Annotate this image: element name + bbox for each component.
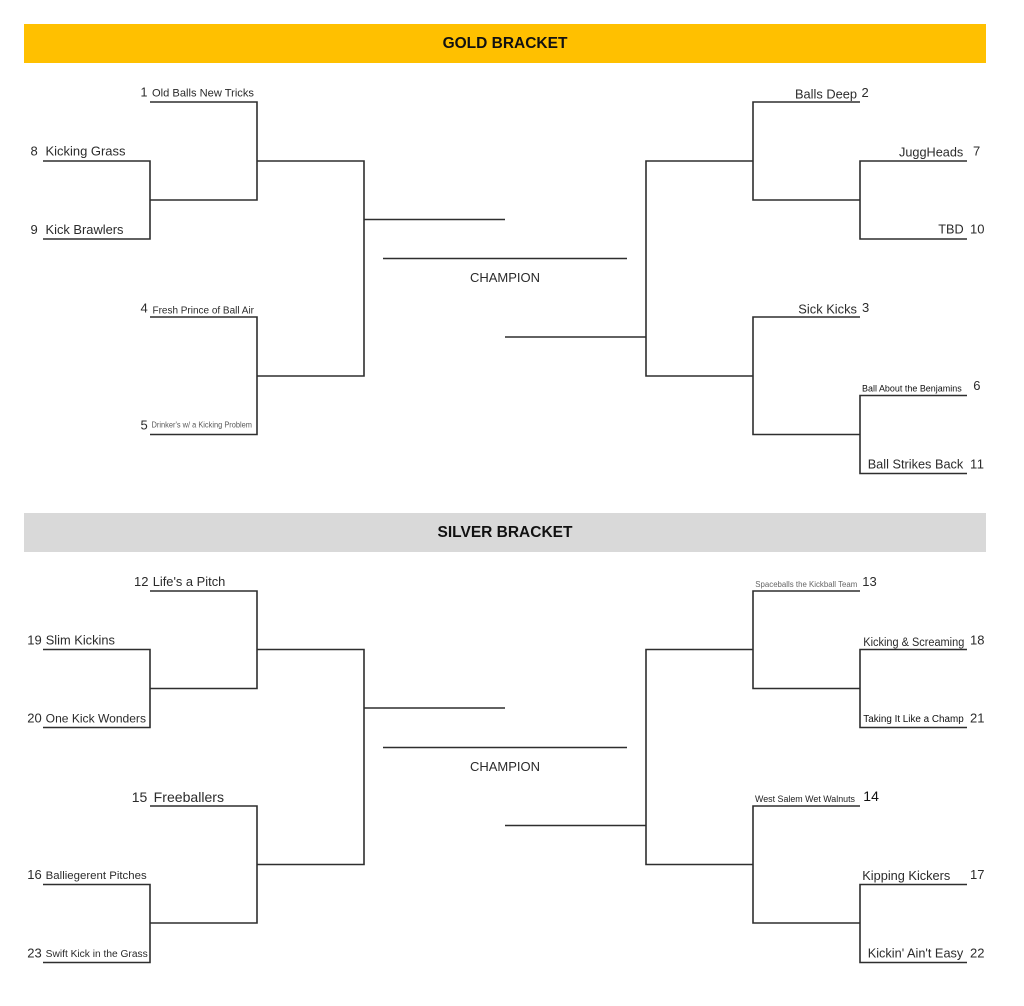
team: 23 Swift Kick in the Grass: 23 [27,945,42,960]
team: 19 Slim Kickins: 19 [27,632,42,647]
team: 3 Sick Kicks: 3 [862,300,869,315]
team: 14 West Salem Wet Walnuts: 14 [863,788,879,804]
team: 13 Spaceballs the Kickball Team [755,574,877,589]
team: 3 Sick Kicks: Sick Kicks [798,301,857,316]
team: 21 Taking It Like a Champ: 21 [970,711,984,726]
team: 7 JuggHeads: JuggHeads [899,145,964,160]
bracket lines: gold left [43,102,505,434]
team: 5 Drinker's w/ a Kicking Problem: Drinker's w/ a Kicking Problem [152,421,252,430]
team: 22 Kickin' Ain't Easy: Kickin' Ain't Easy [868,946,964,961]
team: 12 Life's a Pitch: 12 [134,574,148,589]
heading: silver bracket [24,513,986,552]
heading: gold bracket [24,24,986,63]
team: 18 Kicking & Screaming: 18 [970,632,984,647]
team: 11 Ball Strikes Back: 11 [970,457,984,472]
team: 15 Freeballers: Freeballers [154,789,224,805]
team: 1 Old Balls New Tricks: 1 [140,86,148,100]
team: 2 Balls Deep: 2 [862,85,869,100]
team: 16 Balliegerent Pitches: 16 [27,867,42,882]
heading: silver bracket: SILVER BRACKET [438,524,573,541]
bracket lines: silver left [43,591,505,962]
team: 2 Balls Deep: Balls Deep [795,86,857,101]
team: 15 Freeballers: 15 [132,789,147,805]
team: 16 Balliegerent Pitches [27,867,147,882]
team: 20 One Kick Wonders: 20 [27,711,42,726]
team: 6 Ball About the Benjamins [862,378,981,394]
heading: gold bracket: GOLD BRACKET [443,35,568,52]
team: 13 Spaceballs the Kickball Team: 13 [862,574,877,589]
team: 21 Taking It Like a Champ [863,711,984,726]
team: 9 Kick Brawlers: Kick Brawlers [46,222,124,237]
team: 19 Slim Kickins: Slim Kickins [46,632,115,647]
team: 17 Kipping Kickers: Kipping Kickers [862,868,951,883]
team: 6 Ball About the Benjamins: 6 [973,378,981,393]
team: 14 West Salem Wet Walnuts [755,788,879,804]
team: 23 Swift Kick in the Grass: Swift Kick in the Grass [46,949,148,960]
bracket lines: silver right [505,591,967,962]
team: 17 Kipping Kickers [862,867,984,883]
team: 21 Taking It Like a Champ: Taking It Like a Champ [863,714,964,725]
champion line and label: gold: CHAMPION [470,270,540,285]
team: 10 TBD [938,222,984,237]
team: 18 Kicking & Screaming: Kicking & Screaming [863,637,964,649]
team: 18 Kicking & Screaming [863,632,984,649]
team: 23 Swift Kick in the Grass [27,945,148,960]
team: 16 Balliegerent Pitches: Balliegerent Pitches [46,870,147,882]
team: 10 TBD: TBD [938,222,964,237]
team: 9 Kick Brawlers: 9 [30,222,38,237]
team: 10 TBD: 10 [970,222,984,237]
team: 8 Kicking Grass: Kicking Grass [46,144,126,159]
team: 4 Fresh Prince of Ball Air: 4 [140,301,148,316]
team: 22 Kickin' Ain't Easy: 22 [970,946,984,961]
champion line and label: silver: CHAMPION [470,759,540,774]
team: 5 Drinker's w/ a Kicking Problem: 5 [140,417,148,432]
panel: silver bracket [24,513,986,962]
team: 12 Life's a Pitch: Life's a Pitch [153,574,225,589]
team: 4 Fresh Prince of Ball Air [140,301,255,317]
team: 6 Ball About the Benjamins: Ball About the Benjamins [862,384,962,394]
team: 7 JuggHeads: 7 [973,144,980,159]
team: 8 Kicking Grass: 8 [30,144,38,159]
team: 4 Fresh Prince of Ball Air: Fresh Prince of Ball Air [152,306,255,317]
team: 1 Old Balls New Tricks: Old Balls New Tricks [152,88,254,100]
panel: gold bracket [24,24,986,474]
team: 14 West Salem Wet Walnuts: West Salem Wet Walnuts [755,794,855,804]
team: 20 One Kick Wonders: One Kick Wonders [46,712,146,726]
bracket lines: gold right [505,102,967,474]
team: 5 Drinker's w/ a Kicking Problem [140,417,252,432]
team: 17 Kipping Kickers: 17 [970,867,984,882]
team: 11 Ball Strikes Back: Ball Strikes Back [868,457,964,472]
team: 13 Spaceballs the Kickball Team: Spaceballs the Kickball Team [755,580,858,589]
